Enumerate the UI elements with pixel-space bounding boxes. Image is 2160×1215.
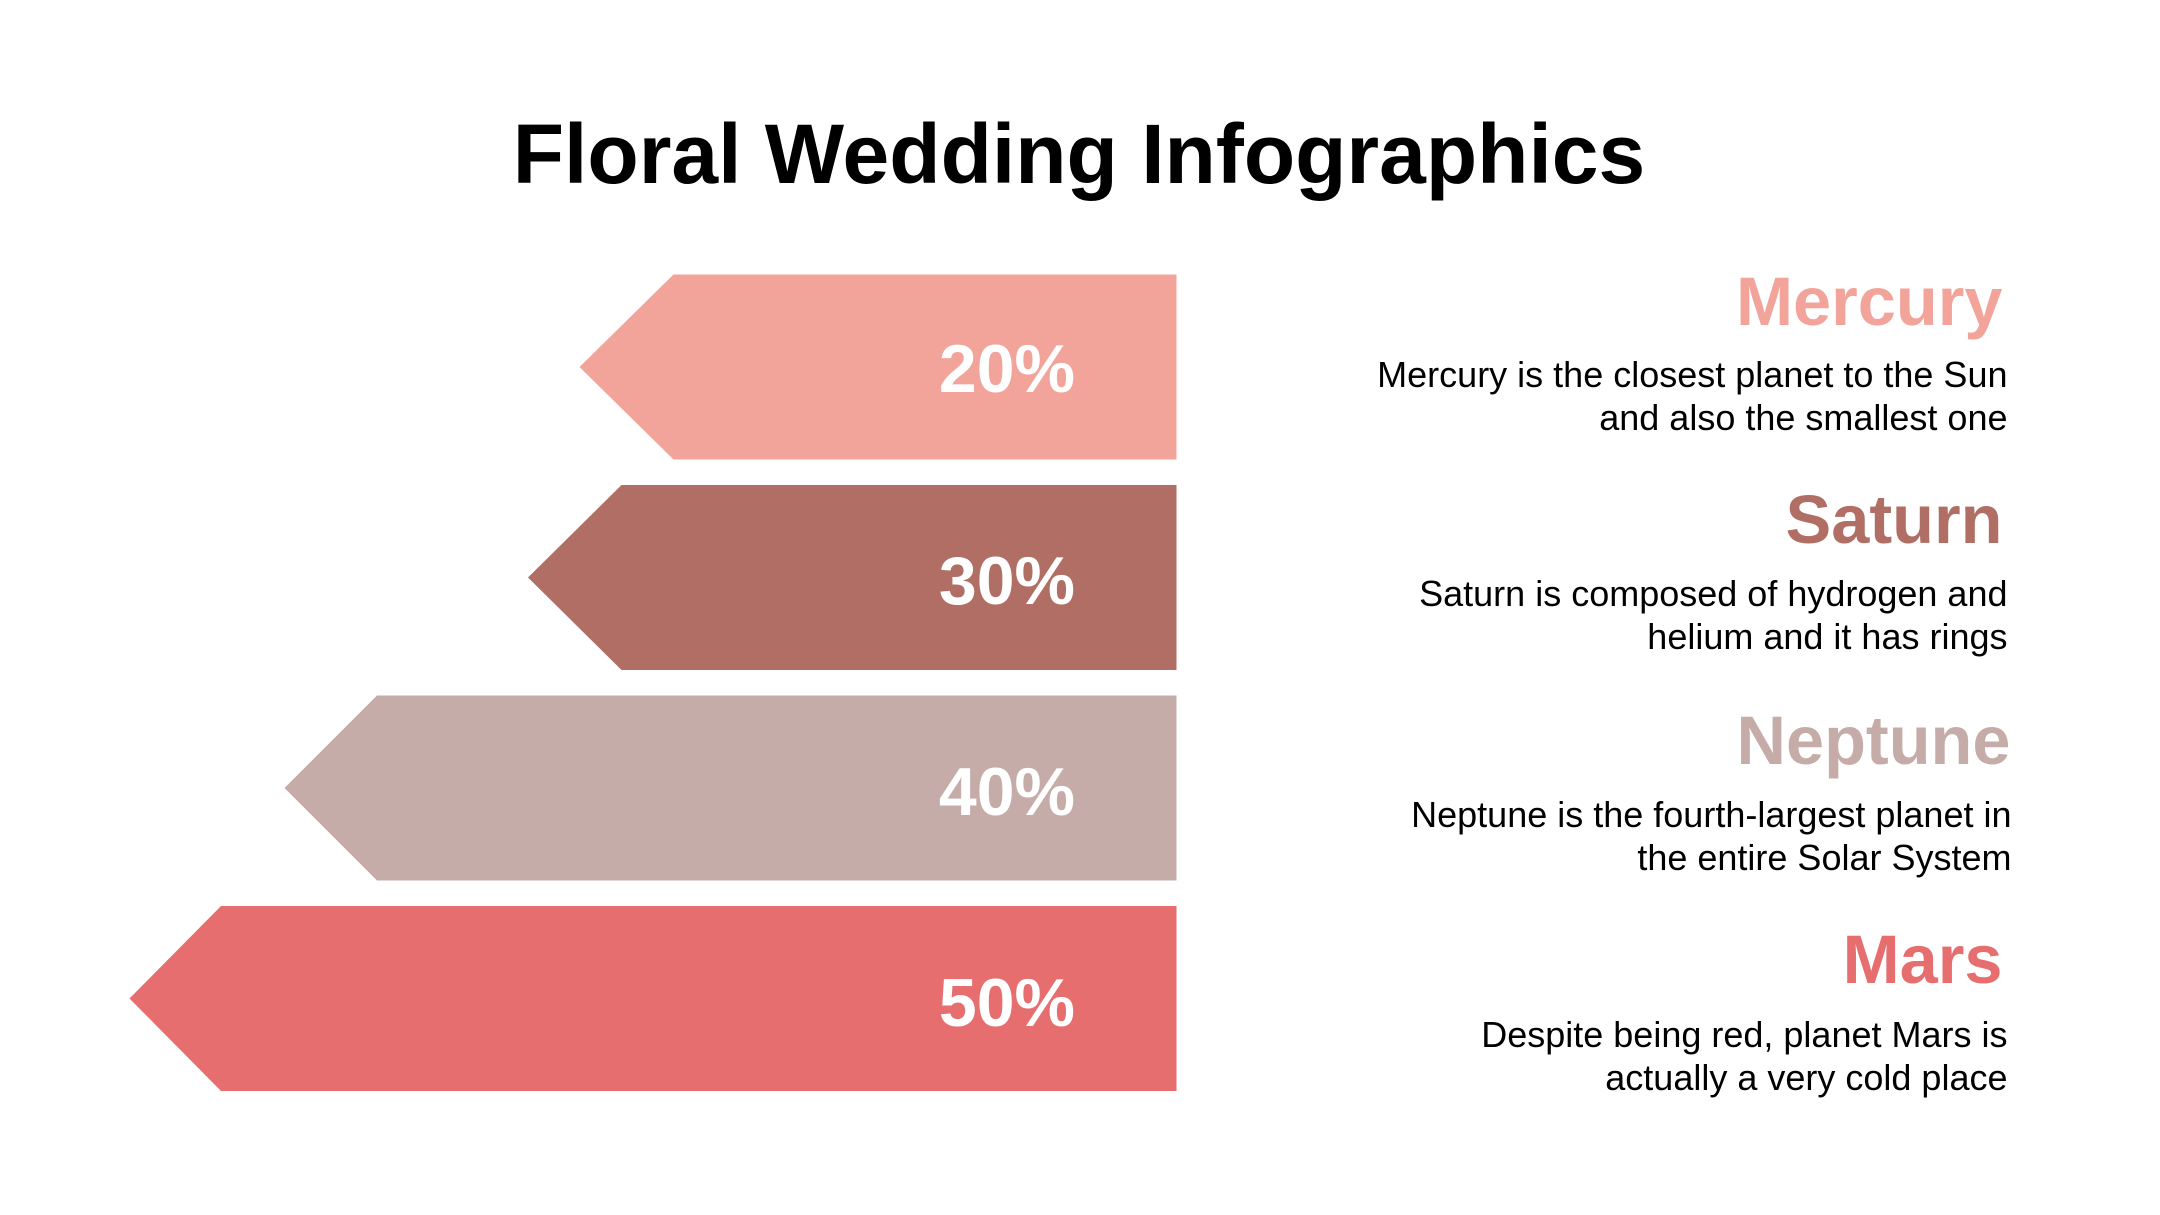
arrow bar: Mars [130, 906, 1176, 1091]
heading: Neptune: Neptune [1736, 702, 2010, 779]
heading: Saturn: Saturn [1786, 481, 2002, 558]
text: Mars [1481, 1014, 2008, 1098]
text: Saturn: Saturn is composed of hydrogen and [1419, 573, 2008, 614]
value: 40%: 40% [939, 754, 1075, 830]
title: Floral Wedding Infographics [513, 106, 1645, 200]
value: 50%: 50% [939, 964, 1075, 1040]
text: Neptune: the entire Solar System [1637, 837, 2012, 878]
text: Mars: actually a very cold place [1605, 1057, 2008, 1098]
text: Mercury [1377, 354, 2008, 438]
arrow bar: Neptune [284, 696, 1176, 880]
text: Neptune [1411, 794, 2012, 878]
heading: Mercury: Mercury [1736, 263, 2002, 340]
text: Mercury: and also the smallest one [1599, 397, 2008, 438]
arrow bar: Saturn [528, 485, 1176, 670]
text: Saturn: helium and it has rings [1647, 616, 2008, 657]
text: Mars: Despite being red, planet Mars is [1481, 1014, 2008, 1055]
text: Saturn [1419, 573, 2008, 657]
text: Mercury: Mercury is the closest planet to the Sun [1377, 354, 2008, 394]
value: 20%: 20% [939, 331, 1075, 407]
heading: Mars: Mars [1843, 921, 2002, 998]
value: 30%: 30% [939, 542, 1075, 618]
arrow bar: Mercury [580, 274, 1176, 460]
text: Neptune: Neptune is the fourth-largest planet in [1411, 794, 2012, 834]
